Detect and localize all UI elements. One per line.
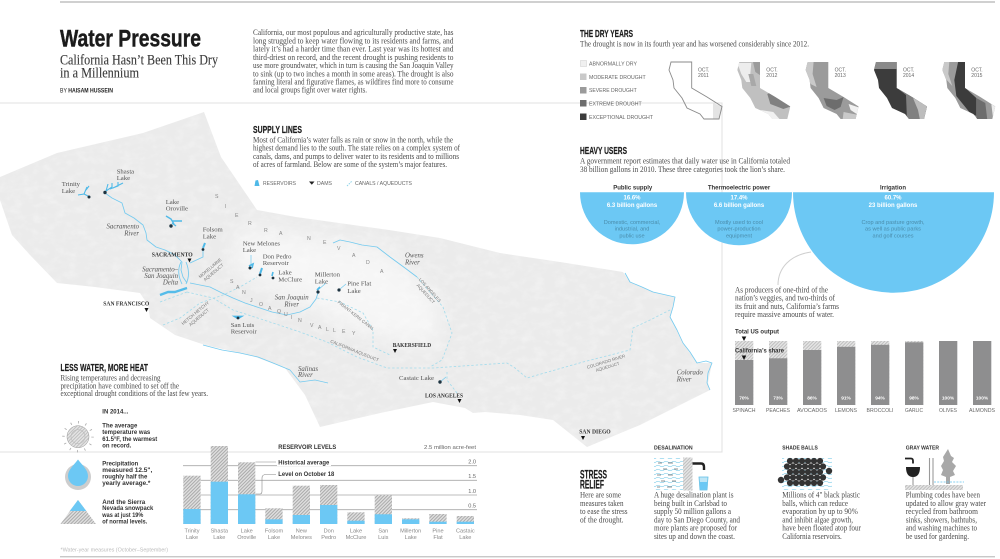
thermoelectric semicircle: Mostly used to cool — [715, 220, 763, 226]
public supply semicircle: Domestic, commercial, — [604, 220, 661, 226]
desalination: DESALINATION — [654, 445, 693, 451]
Castaic Lake — [456, 516, 475, 541]
map: October 2015: 2015 — [971, 73, 983, 79]
spinach bar — [732, 341, 756, 414]
heading: STRESS — [580, 469, 607, 481]
drought legend: SEVERE DROUGHT — [589, 88, 637, 94]
aqueduct labels: CALIFORNIA AQUEDUCT — [330, 339, 380, 363]
mountain and valley labels: SIERRA — [215, 194, 283, 237]
key: level on October 18 — [256, 470, 335, 494]
gray water: Plumbing codes have been — [906, 491, 981, 500]
map: October 2011 — [669, 62, 722, 119]
irrigation semicircle: as well as public parks — [865, 227, 921, 233]
San Luis: Luis — [378, 535, 389, 541]
icon: sun temperature — [64, 422, 92, 451]
intro paragraph: use more groundwater, which in turn is causing the San Joaquin Valley — [253, 61, 454, 70]
lemons bar — [835, 341, 857, 414]
Castaic Lake: Castaic — [456, 528, 475, 534]
icon: water drop — [65, 460, 91, 490]
New Melones: Melones — [291, 535, 312, 541]
lake and river labels: McClure — [278, 276, 302, 283]
desalination: A huge desalination plant is — [654, 491, 734, 500]
shade balls: California reservoirs. — [782, 532, 842, 541]
lake and river labels: San Joaquin — [275, 295, 309, 302]
desalination — [654, 445, 741, 541]
lake and river labels: Lake — [203, 234, 216, 241]
aqueduct labels — [181, 257, 627, 375]
description: highest demand lies to the south. The state relies on a complex system of — [253, 144, 460, 152]
lake and river labels: Owens — [405, 253, 424, 260]
lake and river labels: Colorado — [677, 370, 703, 377]
Lake Oroville: Lake — [241, 528, 253, 534]
panel: heavy users — [580, 145, 994, 319]
description: Here are some — [580, 491, 621, 500]
axis labels: 0.5 — [468, 504, 476, 510]
thermoelectric semicircle: equipment — [726, 233, 753, 239]
description: of acres of farmland. Below are some of the system’s major features. — [253, 160, 447, 169]
subtitle — [60, 52, 219, 82]
heading: HEAVY USERS — [580, 145, 627, 157]
lake and river labels: Millerton — [315, 272, 341, 279]
aqueducts and canals — [160, 277, 670, 393]
precipitation text: measured 12.5", — [102, 468, 153, 474]
subtitle: in a Millennium — [60, 66, 140, 82]
almonds bar: ALMONDS — [969, 408, 995, 414]
drought legend: ABNORMALLY DRY — [589, 61, 637, 67]
aqueduct labels: AQUEDUCT — [416, 283, 436, 305]
aqueduct labels: MOKELUMNE — [198, 257, 223, 279]
callout text: its fruit and nuts, California’s farms — [735, 302, 839, 311]
aqueduct labels: LOS ANGELES — [418, 277, 442, 303]
avocados bar — [797, 341, 827, 414]
lake and river labels: Lake — [166, 199, 179, 206]
description: of the drought. — [580, 515, 624, 524]
snowpack text: was at just 19% — [101, 513, 144, 519]
temperature text: 61.5°F, the warmest — [102, 437, 157, 443]
top rule — [60, 1, 995, 3]
olives bar: OLIVES — [939, 408, 957, 414]
city labels — [103, 252, 611, 440]
peaches bar: PEACHES — [766, 408, 790, 414]
intro paragraph: to sink (up to two inches a month in some areas). The drought is also — [253, 69, 454, 78]
avocados bar: 86% — [807, 396, 818, 402]
peaches bar — [766, 341, 790, 414]
lake and river labels: Lake — [315, 278, 328, 285]
spinach bar: 70% — [739, 396, 750, 402]
lemons bar: LEMONS — [835, 408, 857, 414]
snowpack text: And the Sierra — [102, 500, 146, 506]
desalination: supply 50 million gallons a — [654, 507, 731, 516]
mountain and valley labels — [215, 194, 384, 337]
irrigation semicircle — [793, 186, 994, 293]
map: October 2012: OCT. — [766, 68, 778, 74]
lake and river labels — [62, 168, 703, 383]
irrigation semicircle: 60.7% — [884, 196, 902, 202]
reservoirs and dams — [78, 182, 442, 384]
legend — [254, 180, 412, 187]
description: precipitation have combined to set off the — [60, 381, 179, 390]
lake and river labels: River — [283, 301, 299, 308]
heading: SUPPLY LINES — [253, 124, 302, 136]
map: October 2013 — [806, 62, 858, 119]
drought legend: EXTREME DROUGHT — [589, 101, 642, 107]
intro paragraph: third-driest on record, and the recent drought is pushing residents to — [253, 53, 454, 62]
aqueduct labels: AQUEDUCT — [595, 361, 620, 373]
map panel frame — [0, 103, 722, 452]
New Melones: New — [296, 528, 308, 534]
Folsom Lake — [265, 508, 284, 541]
subtitle: California Hasn’t Been This Dry — [60, 52, 219, 68]
mountain and valley labels: SANJOAQUINVALLEY — [230, 279, 356, 337]
temperature text — [102, 424, 157, 449]
snowpack text: of normal levels. — [102, 519, 148, 525]
California share label: California’s share — [735, 348, 785, 354]
irrigation semicircle: 23 billion gallons — [869, 203, 918, 209]
icon: snowpack mountain — [60, 500, 96, 524]
lake and river labels: Lake — [278, 269, 292, 276]
lake and river labels: Sacramento — [107, 224, 140, 231]
in 2014 label: IN 2014... — [102, 409, 129, 415]
aqueduct labels: FRIANT-KERN CANAL — [337, 300, 376, 332]
lake and river labels: Pine Flat — [347, 281, 371, 288]
city labels: SAN FRANCISCO — [103, 301, 149, 308]
city labels: SACRAMENTO — [152, 252, 193, 259]
California share label — [735, 348, 785, 360]
description: A government report estimates that daily water use in California totaled — [580, 156, 791, 165]
lake and river labels: Folsom — [203, 227, 224, 234]
byline: BY HAISAM HUSSEIN — [60, 88, 113, 94]
lake and river labels: Oroville — [166, 206, 188, 213]
mountain and valley labels: NEVADA — [307, 236, 384, 275]
drought legend: EXCEPTIONAL DROUGHT — [589, 115, 654, 121]
Don Pedro — [320, 485, 337, 541]
lake and river labels: Lake — [62, 188, 75, 195]
thermoelectric semicircle: 6.6 billion gallons — [714, 203, 765, 209]
thermoelectric semicircle — [686, 186, 792, 245]
desalination: more plants are proposed for — [654, 524, 737, 533]
map: October 2015 — [942, 62, 996, 119]
lake and river labels: Shasta — [117, 168, 134, 175]
legend: DAMS — [317, 181, 332, 187]
public supply semicircle: 6.3 billion gallons — [607, 203, 658, 209]
precipitation text: Precipitation — [102, 462, 139, 468]
heading — [580, 469, 607, 491]
title: Water Pressure — [60, 26, 201, 53]
land shape — [0, 112, 712, 447]
shade balls: have been floated atop four — [782, 524, 861, 533]
callout text: As producers of one-third of the — [735, 285, 828, 294]
shade balls: SHADE BALLS — [782, 445, 818, 451]
public supply semicircle: public use — [619, 233, 645, 239]
lake and river labels: Salinas — [298, 366, 318, 373]
gray water: sinks, showers, bathtubs, — [906, 515, 977, 524]
panel: stress relief — [580, 445, 986, 541]
shade balls: evaporation by up to 90% — [782, 507, 858, 516]
shade balls — [778, 445, 861, 541]
gray water: be used for gardening. — [906, 532, 969, 541]
Lake Oroville — [237, 462, 256, 541]
Pine Flat: Pine — [432, 528, 444, 534]
drought legend — [580, 60, 654, 121]
total US output label: Total US output — [735, 329, 779, 335]
key: historical average: Historical average — [278, 460, 330, 466]
desalination: being built in Carlsbad to — [654, 499, 727, 508]
Millerton Lake: Millerton — [400, 528, 421, 534]
San Luis: San — [378, 528, 388, 534]
intro paragraph: long struggled to keep water flowing to its residents and farms, and — [253, 36, 454, 45]
description: exceptional drought conditions of the last few years. — [60, 389, 208, 398]
description — [580, 491, 628, 524]
heading: LESS WATER, MORE HEAT — [60, 362, 148, 374]
lake and river labels: Delta — [162, 280, 179, 287]
irrigation semicircle: Irrigation — [880, 186, 906, 192]
Don Pedro: Pedro — [321, 535, 336, 541]
aqueduct labels: HETCH HETCHY — [181, 300, 210, 326]
snowpack text — [101, 500, 154, 525]
title block — [60, 26, 219, 95]
almonds bar — [969, 341, 995, 414]
garlic bar: 98% — [909, 396, 920, 402]
olives bar — [939, 341, 957, 414]
description — [580, 156, 791, 174]
public supply semicircle — [580, 186, 684, 244]
Lake Oroville: Oroville — [237, 535, 256, 541]
Pine Flat — [429, 514, 447, 541]
Lake McClure — [346, 512, 366, 541]
axis labels: 1.5 — [468, 474, 476, 480]
description: Most of California’s water falls as rain or snow in the north, while the — [253, 135, 453, 144]
map: October 2015: OCT. — [971, 68, 983, 74]
intro paragraph: lately it’s had a harder time than ever. Last year was its hottest and — [253, 44, 454, 54]
lake and river labels: Lake — [347, 288, 361, 295]
lake and river labels: Don Pedro — [263, 253, 292, 260]
callout arrow — [778, 252, 811, 285]
thermoelectric semicircle: Thermoelectric power — [708, 186, 771, 192]
map: October 2012: 2012 — [766, 73, 778, 79]
peaches bar: 73% — [773, 396, 784, 402]
temperature text: The average — [102, 424, 138, 430]
lake and river labels: River — [404, 260, 420, 267]
panel: less water, more heat — [60, 362, 208, 554]
legend: CANALS / AQUEDUCTS — [355, 181, 412, 187]
aqueduct labels: AQUEDUCT — [188, 307, 210, 327]
terrain texture — [238, 225, 432, 343]
gray water: and washing machines to — [906, 524, 977, 533]
lake and river labels: Lake — [243, 247, 256, 254]
thermoelectric semicircle: power-production — [717, 227, 761, 233]
olives bar: 100% — [942, 396, 955, 402]
description: The drought is now in its fourth year and has worsened considerably since 2012. — [580, 40, 809, 49]
bar chart: California share of US output — [732, 329, 995, 414]
chart heading: RESERVOIR LEVELS — [278, 445, 336, 451]
temperature text: on record. — [102, 443, 132, 449]
garlic bar — [905, 341, 923, 414]
lake and river labels: San Joaquin — [144, 273, 179, 280]
Millerton Lake: Lake — [405, 535, 417, 541]
intro paragraph: and local groups fight over water rights. — [253, 86, 367, 95]
public supply semicircle: 16.6% — [623, 196, 641, 202]
lake and river labels: Lake — [117, 175, 130, 182]
irrigation semicircle: and golf courses — [872, 233, 914, 239]
lake and river labels: New Melones — [243, 240, 280, 247]
Castaic Lake: Lake — [459, 535, 471, 541]
Pine Flat: Flat — [433, 535, 443, 541]
Millerton Lake — [400, 518, 421, 541]
shade balls: and inhibit algae growth, — [782, 515, 853, 524]
lake and river labels: Castaic Lake — [399, 375, 434, 382]
axis labels — [468, 460, 476, 510]
heading: THE DRY YEARS — [580, 28, 633, 40]
city labels: SAN DIEGO — [579, 429, 611, 436]
desalination: day to San Diego County, and — [654, 515, 741, 524]
broccoli bar: BROCCOLI — [866, 408, 894, 414]
intro paragraph — [253, 28, 454, 95]
spinach bar: SPINACH — [732, 408, 756, 414]
avocados bar: AVOCADOS — [797, 408, 827, 414]
map: October 2013: OCT. — [835, 68, 846, 74]
map of California — [0, 105, 722, 450]
map: October 2013: 2013 — [835, 73, 846, 79]
gray water: GRAY WATER — [906, 445, 939, 451]
description: to ease the stress — [580, 507, 628, 516]
Trinity Lake: Lake — [186, 535, 198, 541]
bars — [183, 446, 475, 541]
legend: RESERVOIRS — [263, 181, 296, 187]
Folsom Lake: Lake — [268, 535, 280, 541]
drought legend: MODERATE DROUGHT — [589, 75, 646, 81]
aqueduct labels: COLORADO RIVER — [586, 353, 626, 370]
intro paragraph: California, our most populous and agriculturally productive state, has — [253, 28, 454, 37]
lake and river labels: Reservoir — [263, 260, 289, 267]
panel: the dry years — [580, 28, 999, 122]
thermoelectric semicircle: 17.4% — [730, 196, 748, 202]
description — [253, 135, 460, 169]
Shasta Lake: Lake — [213, 535, 225, 541]
callout text: nation’s veggies, and two-thirds of — [735, 294, 835, 303]
lake and river labels: River — [676, 376, 692, 383]
garlic bar: GARLIC — [905, 408, 923, 414]
map: October 2012 — [738, 62, 790, 119]
precipitation text: roughly half the — [102, 474, 148, 480]
Folsom Lake: Folsom — [265, 528, 284, 534]
footnote: *Water-year measures (October–September) — [60, 548, 168, 554]
precipitation text — [102, 462, 153, 487]
irrigation semicircle: Crop and pasture growth, — [861, 220, 925, 226]
axis labels: 2.0 — [468, 460, 476, 466]
almonds bar: 100% — [976, 396, 989, 402]
grid — [183, 466, 477, 510]
city labels: LOS ANGELES — [425, 392, 463, 399]
New Melones — [291, 486, 312, 541]
broccoli bar — [866, 341, 894, 414]
public supply semicircle: Public supply — [613, 186, 653, 192]
broccoli bar: 94% — [875, 396, 886, 402]
key: level on October 18: Level on October 18 — [278, 472, 335, 478]
description: Rising temperatures and decreasing — [60, 373, 161, 382]
description — [60, 373, 208, 398]
rivers — [105, 193, 712, 390]
chart: reservoir levels — [183, 445, 477, 541]
map: October 2014 — [874, 62, 927, 119]
map: October 2014: OCT. — [903, 68, 914, 74]
icon: desalination plant — [654, 458, 708, 490]
description: canals, dams, and pumps to deliver water to its residents and to millions — [253, 152, 459, 161]
Don Pedro: Don — [324, 528, 334, 534]
icon: shade balls — [778, 458, 832, 490]
description: measures taken — [580, 499, 624, 508]
city labels: BAKERSFIELD — [393, 342, 432, 349]
aqueduct labels: AQUEDUCT — [203, 262, 225, 282]
key: historical average — [256, 458, 331, 466]
desalination: sites up and down the coast. — [654, 532, 735, 541]
map: October 2011: OCT. — [698, 68, 709, 74]
intro paragraph: fanning literal and figurative flames, as wildfires find more to consume — [253, 78, 454, 86]
scale label: 2.5 million acre-feet — [424, 445, 476, 451]
Shasta Lake: Shasta — [211, 528, 229, 534]
shade balls: Millions of 4" black plastic — [782, 491, 860, 500]
gray water — [905, 445, 986, 541]
snowpack text: Nevada snowpack — [102, 506, 154, 512]
map: October 2011: 2011 — [698, 73, 709, 79]
public supply semicircle: industrial, and — [615, 227, 649, 233]
gray water: updated to allow gray water — [906, 499, 986, 508]
Trinity Lake: Trinity — [184, 528, 200, 534]
description: 38 billion gallons in 2010. These three categories took the lion’s share. — [580, 165, 785, 174]
bottom rule — [60, 556, 995, 557]
Shasta Lake — [211, 446, 229, 541]
San Luis — [375, 495, 392, 541]
panel: supply lines — [253, 124, 460, 187]
callout text: require massive amounts of water. — [735, 310, 834, 319]
map: October 2014: 2014 — [903, 73, 914, 79]
Trinity Lake — [183, 476, 201, 541]
callout text — [735, 285, 839, 319]
icon: gray water system — [905, 449, 964, 490]
gray water: recycled from bathroom — [906, 507, 978, 516]
precipitation text: yearly average.* — [102, 481, 151, 487]
Lake McClure: McClure — [346, 535, 366, 541]
Lake McClure: Lake — [350, 528, 362, 534]
total US output label — [735, 329, 779, 341]
temperature text: temperature was — [102, 430, 151, 436]
lake and river labels: Sacramento– — [142, 266, 179, 273]
shade balls: balls, which can reduce — [782, 499, 848, 508]
lake and river labels: Reservoir — [231, 329, 257, 336]
lake and river labels: Trinity — [62, 181, 81, 188]
heading: RELIEF — [580, 479, 604, 491]
lake and river labels: San Luis — [231, 322, 255, 329]
axis labels: 1.0 — [468, 489, 476, 495]
lake and river labels: River — [123, 231, 139, 238]
lemons bar: 91% — [841, 396, 852, 402]
lake and river labels: River — [297, 372, 313, 379]
